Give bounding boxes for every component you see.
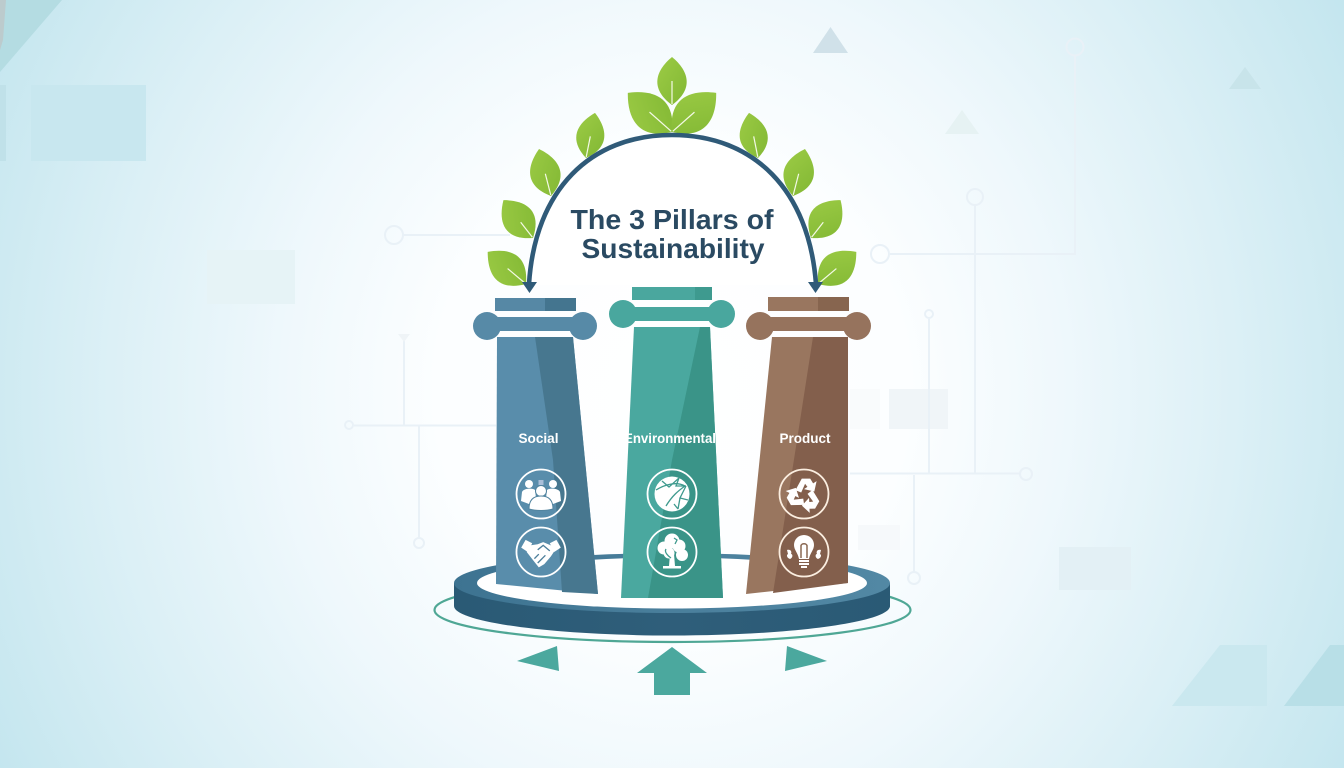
leaf: right 4: [808, 240, 866, 296]
icon: people: [516, 470, 566, 518]
leaf: right 3: [799, 190, 853, 248]
icon: light bulb: [780, 528, 828, 576]
leaf: top: [657, 57, 687, 105]
leaf: left 2: [524, 145, 566, 200]
icon: handshake: [516, 527, 566, 577]
leaf: left 4: [478, 240, 536, 296]
capital: [609, 300, 735, 328]
label: Product: [780, 430, 831, 446]
leaf wreath: [478, 57, 866, 296]
icon: recycle: [780, 470, 828, 518]
arch arrow: [522, 135, 823, 293]
capital: [746, 312, 871, 340]
leaf: big left: [616, 79, 684, 146]
leaf: left 3: [491, 190, 545, 248]
title: The 3 Pillars of: [570, 204, 774, 235]
label: Environmental: [624, 430, 716, 446]
leaf: left 1: [572, 110, 609, 161]
leaf: right 2: [778, 145, 820, 200]
teal orbit ring: [434, 578, 910, 642]
label: Social: [518, 430, 558, 446]
arrow: right: [785, 646, 827, 671]
pillar: Social: [473, 298, 598, 594]
title: [570, 204, 774, 264]
leaf: right 1: [735, 110, 772, 161]
title: Sustainability: [582, 233, 765, 264]
pillar: Environmental: [609, 287, 735, 598]
white interior of arch: [529, 135, 816, 285]
pillar: Product: [746, 297, 871, 594]
circular platform base: [454, 553, 890, 636]
leaf: big right: [660, 79, 728, 146]
arrow: left: [517, 646, 559, 671]
arrow: up: [637, 647, 707, 695]
icon: tree: [648, 528, 696, 576]
capital: [473, 312, 597, 340]
icon: globe with leaf: [648, 470, 696, 518]
